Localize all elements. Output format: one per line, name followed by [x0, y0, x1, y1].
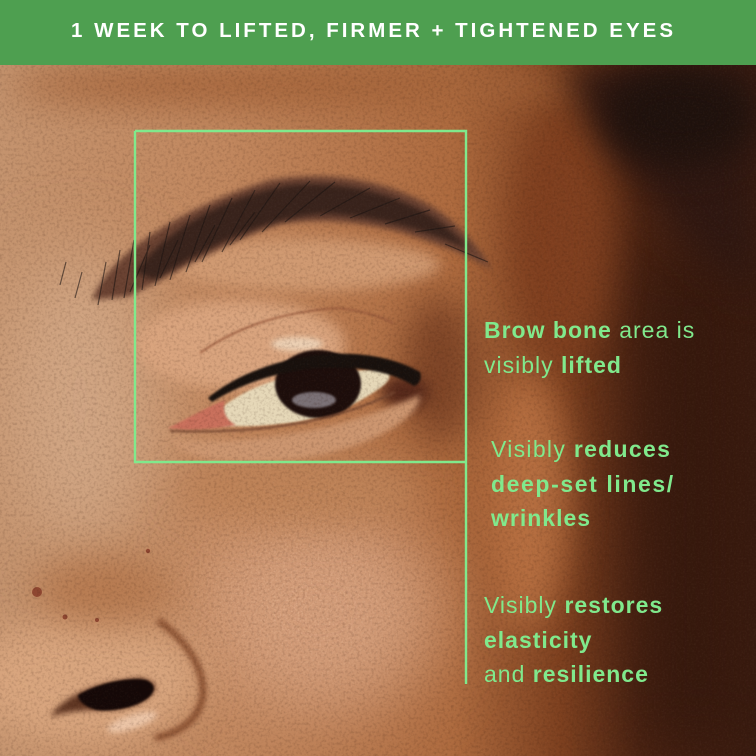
nostril [50, 678, 155, 717]
nose skin [0, 615, 200, 745]
brow bone highlight [170, 239, 440, 291]
sclera [205, 368, 390, 426]
callout: brow bone: visibly lifted [484, 352, 622, 378]
right side shade [640, 240, 756, 756]
lid highlight [271, 337, 323, 351]
lower lash line [170, 392, 395, 432]
callout: brow bone: Brow bone area is [484, 317, 695, 343]
under eye [170, 395, 420, 462]
header banner [0, 0, 756, 65]
brow [60, 176, 492, 305]
callout: elasticity: Visibly restores [484, 592, 663, 618]
callout: elasticity [484, 592, 663, 687]
iris [275, 350, 361, 418]
hair [560, 65, 756, 300]
forehead warm shade [10, 65, 590, 105]
callout: elasticity: elasticity [484, 626, 592, 652]
callout: brow bone [484, 317, 695, 378]
callout: elasticity: and resilience [484, 661, 649, 687]
tear duct [168, 400, 236, 430]
callout: lines and wrinkles: Visibly reduces [491, 436, 671, 462]
left cheek highlight [0, 250, 160, 550]
upper lid skin [135, 300, 345, 390]
eye outer shadow [402, 295, 478, 445]
callout: lines and wrinkles: deep-set lines/ [491, 470, 675, 496]
iris reflection [292, 392, 336, 408]
moles [32, 549, 150, 622]
nose crease [155, 620, 203, 738]
nostril highlight [105, 707, 159, 737]
cheek [200, 505, 440, 715]
header banner: 1 WEEK TO LIFTED, FIRMER + TIGHTENED EYES [71, 19, 676, 42]
callout: lines and wrinkles [491, 436, 675, 531]
callout: lines and wrinkles: wrinkles [491, 505, 591, 531]
nose shade [35, 558, 175, 622]
upper lashes [208, 354, 421, 402]
lid crease [200, 308, 393, 353]
